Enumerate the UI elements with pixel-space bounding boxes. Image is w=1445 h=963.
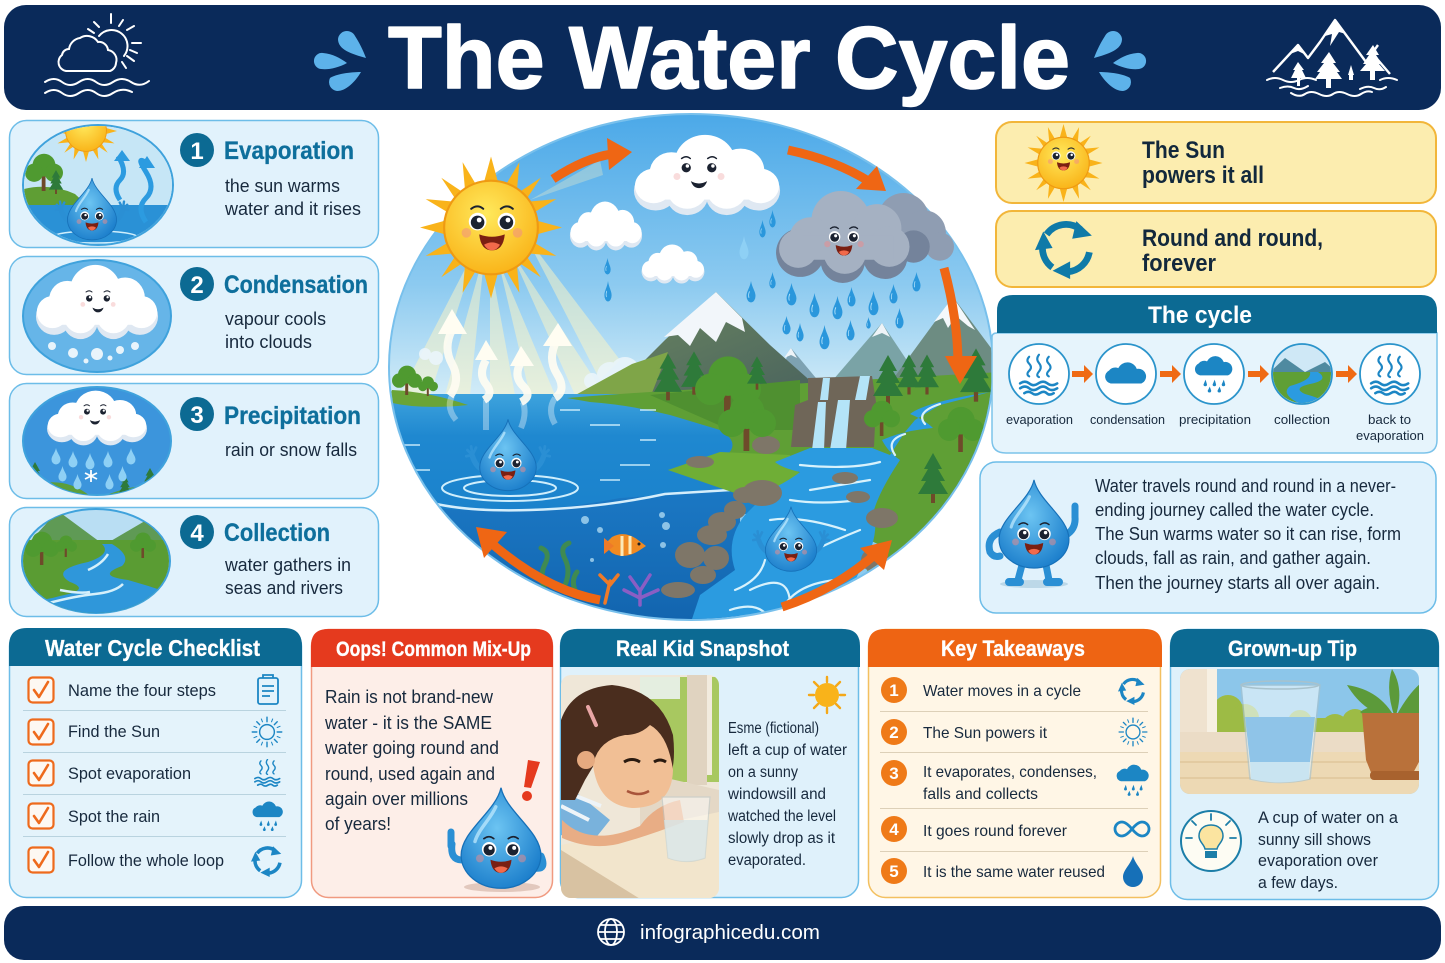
- number badge 1: [180, 133, 214, 167]
- step: collection: [1271, 343, 1333, 424]
- row: find the sun: [28, 717, 282, 747]
- panel: step 3 precipitation: [10, 384, 378, 498]
- website: infographicedu.com: [640, 922, 820, 944]
- icon: light bulb: [1181, 811, 1241, 871]
- fish: [604, 534, 646, 556]
- photo: girl and glass of water: [561, 675, 719, 905]
- character: sun: [420, 156, 562, 298]
- icon: water drops right of title: [1094, 31, 1146, 91]
- body text: clouds, fall as rain, and gather again.: [1095, 548, 1371, 568]
- body text: water - it is the SAME: [324, 713, 492, 733]
- takeaway 5: [881, 856, 1143, 887]
- description: the sun warms: [225, 176, 340, 196]
- takeaway 2: The Sun powers it: [923, 725, 1048, 742]
- small clouds: [570, 202, 704, 284]
- body text: Esme (fictional): [728, 720, 819, 737]
- panel: key takeaways: [868, 629, 1162, 898]
- description: water gathers in: [224, 555, 351, 575]
- takeaway 1: Water moves in a cycle: [923, 683, 1081, 700]
- body text: slowly drop as it: [728, 830, 836, 847]
- right land: [567, 372, 992, 572]
- body text: [727, 720, 847, 869]
- text: [1142, 137, 1264, 189]
- step: collection: collection: [1274, 412, 1330, 427]
- takeaway 5: It is the same water reused: [923, 864, 1105, 881]
- takeaway 3: falls and collects: [923, 786, 1038, 803]
- illustration: drop in water under sun: [22, 124, 174, 246]
- body text: Rain is not brand-new: [325, 687, 494, 707]
- takeaway 4: 4: [889, 820, 899, 839]
- icon: sun: [1024, 124, 1102, 202]
- illustration: smiling cloud: [23, 260, 171, 372]
- panel: step 1 evaporation: [8, 120, 380, 248]
- arrow: [1160, 365, 1181, 383]
- rocks: [661, 436, 898, 598]
- header banner: [4, 5, 1441, 110]
- body text: evaporated.: [728, 852, 806, 869]
- body text: Then the journey starts all over again.: [1095, 573, 1380, 593]
- central water cycle illustration: [385, 110, 1000, 625]
- number badge 4: 4: [190, 520, 204, 547]
- character: grey rain cloud: [776, 191, 954, 283]
- heading: Real Kid Snapshot: [616, 636, 790, 661]
- panel: step 2 condensation: [10, 256, 378, 374]
- step: back to evaporation: evaporation: [1356, 428, 1424, 443]
- panel: the cycle: [992, 295, 1437, 453]
- body text: [324, 687, 499, 834]
- panel: round and round: [996, 211, 1436, 287]
- body text: [1095, 476, 1401, 593]
- icon: mountains line art: [1267, 20, 1397, 96]
- illustration: rain cloud: [20, 387, 175, 498]
- body text: a few days.: [1258, 873, 1338, 892]
- step: condensation: [1090, 344, 1165, 427]
- description: [224, 176, 361, 219]
- sea: [385, 394, 997, 514]
- row: follow the whole loop: Follow the whole loop: [68, 851, 224, 870]
- description: water and it rises: [224, 199, 361, 219]
- body text: windowsill and: [727, 786, 826, 803]
- step: precipitation: [1179, 344, 1251, 427]
- footer banner: [4, 906, 1441, 960]
- description: [225, 309, 326, 352]
- body text: water going round and: [324, 738, 499, 758]
- character: pointing drop: [989, 480, 1075, 588]
- row: follow the whole loop: [28, 846, 281, 877]
- number badge 4: [180, 515, 214, 549]
- panel: description with drop: [980, 462, 1436, 613]
- title: The Water Cycle: [388, 8, 1070, 107]
- step: condensation: condensation: [1090, 412, 1165, 427]
- cycle arrows (orange): [476, 138, 977, 607]
- body text: sunny sill shows: [1258, 830, 1371, 849]
- sun rays: [400, 160, 620, 395]
- trees: [654, 354, 682, 400]
- row: name the four steps: Name the four steps: [68, 681, 216, 700]
- photo: glass of water on window sill: [1180, 669, 1425, 794]
- row: spot evaporation: Spot evaporation: [68, 764, 191, 783]
- deep water section: [442, 492, 740, 619]
- left island: [388, 390, 468, 407]
- illustration: river landscape: [20, 509, 180, 616]
- arrow: [1072, 365, 1093, 383]
- icon: sun: [809, 677, 845, 713]
- body text: A cup of water on a: [1258, 808, 1399, 827]
- far clouds: [419, 348, 652, 389]
- takeaway 4: [881, 816, 1149, 842]
- number badge 3: [180, 397, 214, 431]
- icon: loop arrows: [1035, 221, 1092, 279]
- body text: on a sunny: [728, 764, 798, 781]
- row: spot the rain: Spot the rain: [68, 807, 160, 826]
- character: drop in the sea: [466, 419, 550, 491]
- panel: water cycle checklist: [9, 628, 302, 898]
- body text: of years!: [325, 814, 391, 834]
- panel: grown-up tip: [1170, 629, 1439, 900]
- row: find the sun: Find the Sun: [68, 722, 160, 741]
- icon: cloud and sun line art: [45, 14, 149, 96]
- row: spot the rain: [28, 802, 283, 831]
- text: Round and round,: [1142, 225, 1323, 252]
- step: precipitation: precipitation: [1179, 412, 1251, 427]
- takeaway 3: It evaporates, condenses,: [923, 764, 1097, 781]
- text: [1142, 225, 1323, 277]
- seaweed and coral: [541, 543, 577, 590]
- takeaway 1: 1: [889, 681, 899, 700]
- heading: Grown-up Tip: [1228, 636, 1357, 661]
- description: vapour cools: [225, 309, 326, 329]
- panel: common mix-up: [311, 629, 553, 898]
- arrow: [1336, 365, 1357, 383]
- step: evaporation: evaporation: [1006, 412, 1073, 427]
- description: into clouds: [225, 332, 312, 352]
- takeaway 5: 5: [889, 862, 899, 881]
- body text: The Sun warms water so it can rise, form: [1095, 524, 1401, 544]
- icon: water drops left of title: [314, 31, 366, 91]
- sea ripples: [400, 410, 656, 501]
- number badge 3: 3: [190, 402, 204, 429]
- body text: evaporation over: [1258, 851, 1378, 870]
- number badge 1: 1: [190, 138, 204, 165]
- text: forever: [1142, 250, 1216, 277]
- main mountain: [645, 292, 808, 392]
- river: [690, 392, 990, 625]
- step: back to evaporation: [1356, 344, 1424, 443]
- body text: again over millions: [325, 789, 468, 809]
- takeaway 1: [881, 677, 1145, 705]
- heading: Key Takeaways: [941, 636, 1085, 661]
- body text: Water travels round and round in a never-: [1095, 476, 1396, 496]
- character: drop with exclamation: [451, 760, 543, 892]
- character: drop in the river: [753, 507, 829, 571]
- description: [224, 555, 351, 598]
- icon: globe: [598, 919, 624, 945]
- panel: real kid snapshot: [560, 629, 860, 905]
- body text: left a cup of water: [728, 742, 847, 759]
- description: seas and rivers: [225, 578, 343, 598]
- row: spot evaporation: [28, 759, 280, 786]
- cliff: [791, 376, 876, 447]
- body text: watched the level: [727, 808, 836, 825]
- takeaway 4: It goes round forever: [923, 823, 1068, 840]
- number badge 2: [180, 267, 214, 301]
- rain drops: [604, 210, 921, 349]
- body text: [1258, 808, 1399, 892]
- rising vapour arrows: [438, 309, 572, 430]
- body text: ending journey called the water cycle.: [1095, 500, 1374, 520]
- waterfalls: [812, 376, 870, 450]
- number badge 2: 2: [190, 272, 204, 299]
- heading: The cycle: [1148, 302, 1252, 329]
- takeaway 2: 2: [889, 723, 899, 742]
- panel: the Sun powers it all: [996, 122, 1436, 203]
- takeaway 3: [881, 760, 1149, 803]
- panel: step 4 collection: [10, 508, 378, 616]
- heading: Collection: [224, 519, 330, 547]
- heading: Condensation: [224, 271, 368, 299]
- takeaway 2: [881, 718, 1147, 746]
- back mountains: [786, 348, 816, 379]
- text: powers it all: [1142, 162, 1264, 189]
- step: evaporation: [1006, 344, 1073, 427]
- takeaway 3: 3: [889, 764, 899, 783]
- row: name the four steps: [28, 675, 278, 704]
- description: rain or snow falls: [225, 440, 357, 460]
- step: back to evaporation: back to: [1368, 412, 1411, 427]
- heading: Oops! Common Mix-Up: [336, 638, 531, 661]
- text: The Sun: [1142, 137, 1225, 164]
- heading: Evaporation: [224, 137, 354, 165]
- body text: round, used again and: [325, 764, 495, 784]
- arrow: [1248, 365, 1269, 383]
- character: white cloud: [634, 135, 780, 215]
- sky: [385, 110, 997, 400]
- heading: Precipitation: [224, 402, 361, 430]
- heading: Water Cycle Checklist: [45, 635, 260, 661]
